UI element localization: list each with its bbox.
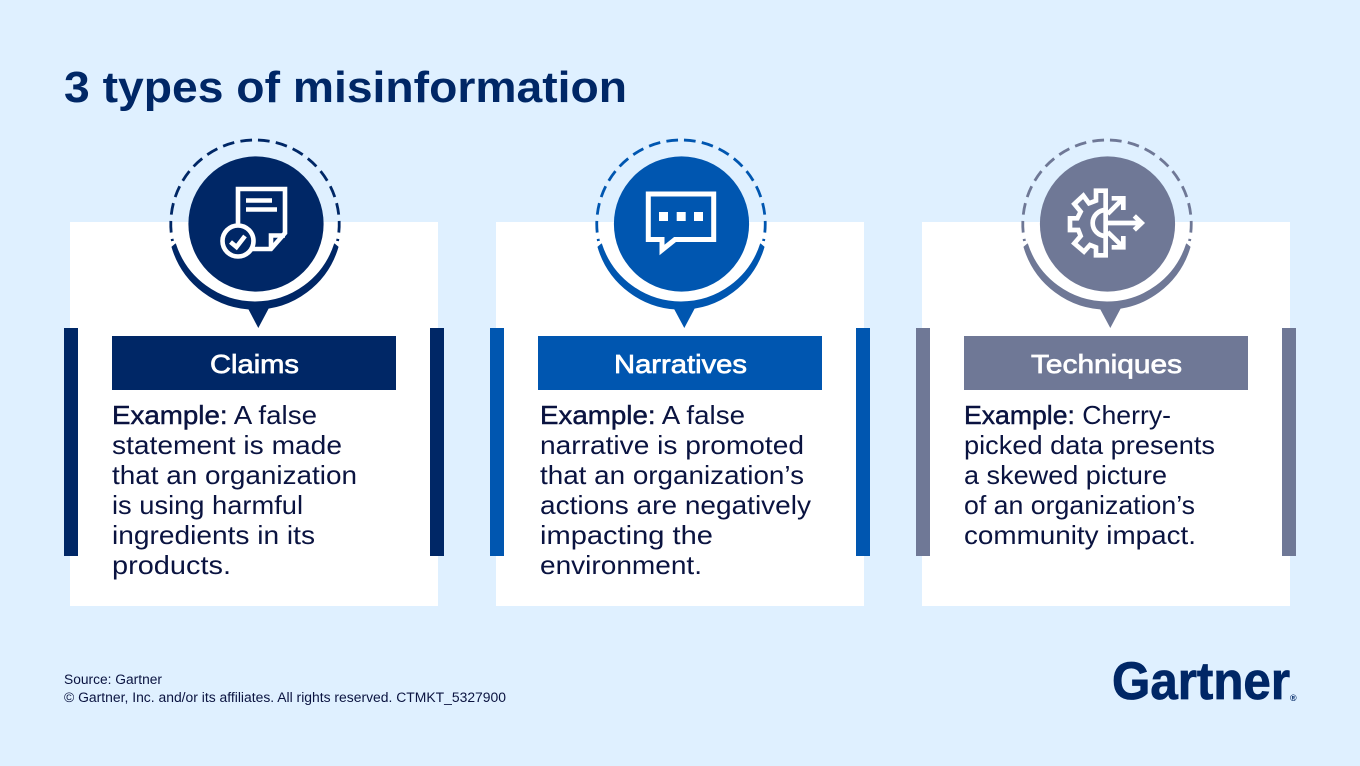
badge: claims — [171, 140, 339, 328]
badge: techniques — [1023, 140, 1191, 328]
icon: gear with arrows — [1070, 191, 1142, 255]
heading: techniques: Techniques — [1031, 349, 1182, 379]
text: narratives example: that an organization’s — [540, 460, 804, 490]
card background: narratives — [496, 222, 864, 606]
text: narratives example: environment. — [540, 550, 702, 580]
side bar right: techniques — [1282, 328, 1296, 556]
text: techniques example: of an organization’s — [964, 490, 1195, 520]
side bar left: claims — [64, 328, 78, 556]
side bar left: narratives — [490, 328, 504, 556]
heading: narratives: Narratives — [614, 349, 747, 379]
text: techniques example — [964, 400, 1215, 550]
text: techniques example: community impact. — [964, 520, 1196, 550]
badge: narratives — [597, 140, 765, 328]
card background: claims — [70, 222, 438, 606]
heading: techniques — [964, 336, 1248, 390]
side bar right: narratives — [856, 328, 870, 556]
text: narratives example: impacting the — [540, 520, 713, 550]
panel: claims — [64, 140, 444, 606]
title: 3 types of misinformation — [64, 63, 627, 112]
heading: claims — [112, 336, 396, 390]
text: claims example: statement is made — [112, 430, 342, 460]
text: claims example: products. — [112, 550, 231, 580]
source note: © Gartner, Inc. and/or its affiliates. All rights reserved. CTMKT_5327900 — [64, 690, 506, 705]
text: narratives example — [540, 400, 811, 580]
text: claims example: Example: A false — [112, 400, 317, 430]
text: narratives example: Example: A false — [540, 400, 745, 430]
text: techniques example: a skewed picture — [964, 460, 1167, 490]
icon: document with check — [222, 189, 285, 256]
text: narratives example: actions are negatively — [540, 490, 811, 520]
side bar left: techniques — [916, 328, 930, 556]
panel: narratives — [490, 140, 870, 606]
heading: claims: Claims — [210, 349, 299, 379]
source note — [64, 672, 506, 705]
heading: narratives — [538, 336, 822, 390]
side bar right: claims — [430, 328, 444, 556]
logo: Gartner: Gartner — [1112, 652, 1290, 711]
logo: Gartner: ® — [1290, 693, 1297, 703]
text: claims example: that an organization — [112, 460, 357, 490]
text: claims example: ingredients in its — [112, 520, 315, 550]
text: techniques example: Example: Cherry- — [964, 400, 1171, 430]
text: narratives example: narrative is promoted — [540, 430, 804, 460]
panel: techniques — [916, 140, 1296, 606]
text: claims example: is using harmful — [112, 490, 303, 520]
source note: Source: Gartner — [64, 672, 163, 687]
text: techniques example: picked data presents — [964, 430, 1215, 460]
card background: techniques — [922, 222, 1290, 606]
text: claims example — [112, 400, 357, 580]
icon: speech bubble — [648, 194, 714, 250]
